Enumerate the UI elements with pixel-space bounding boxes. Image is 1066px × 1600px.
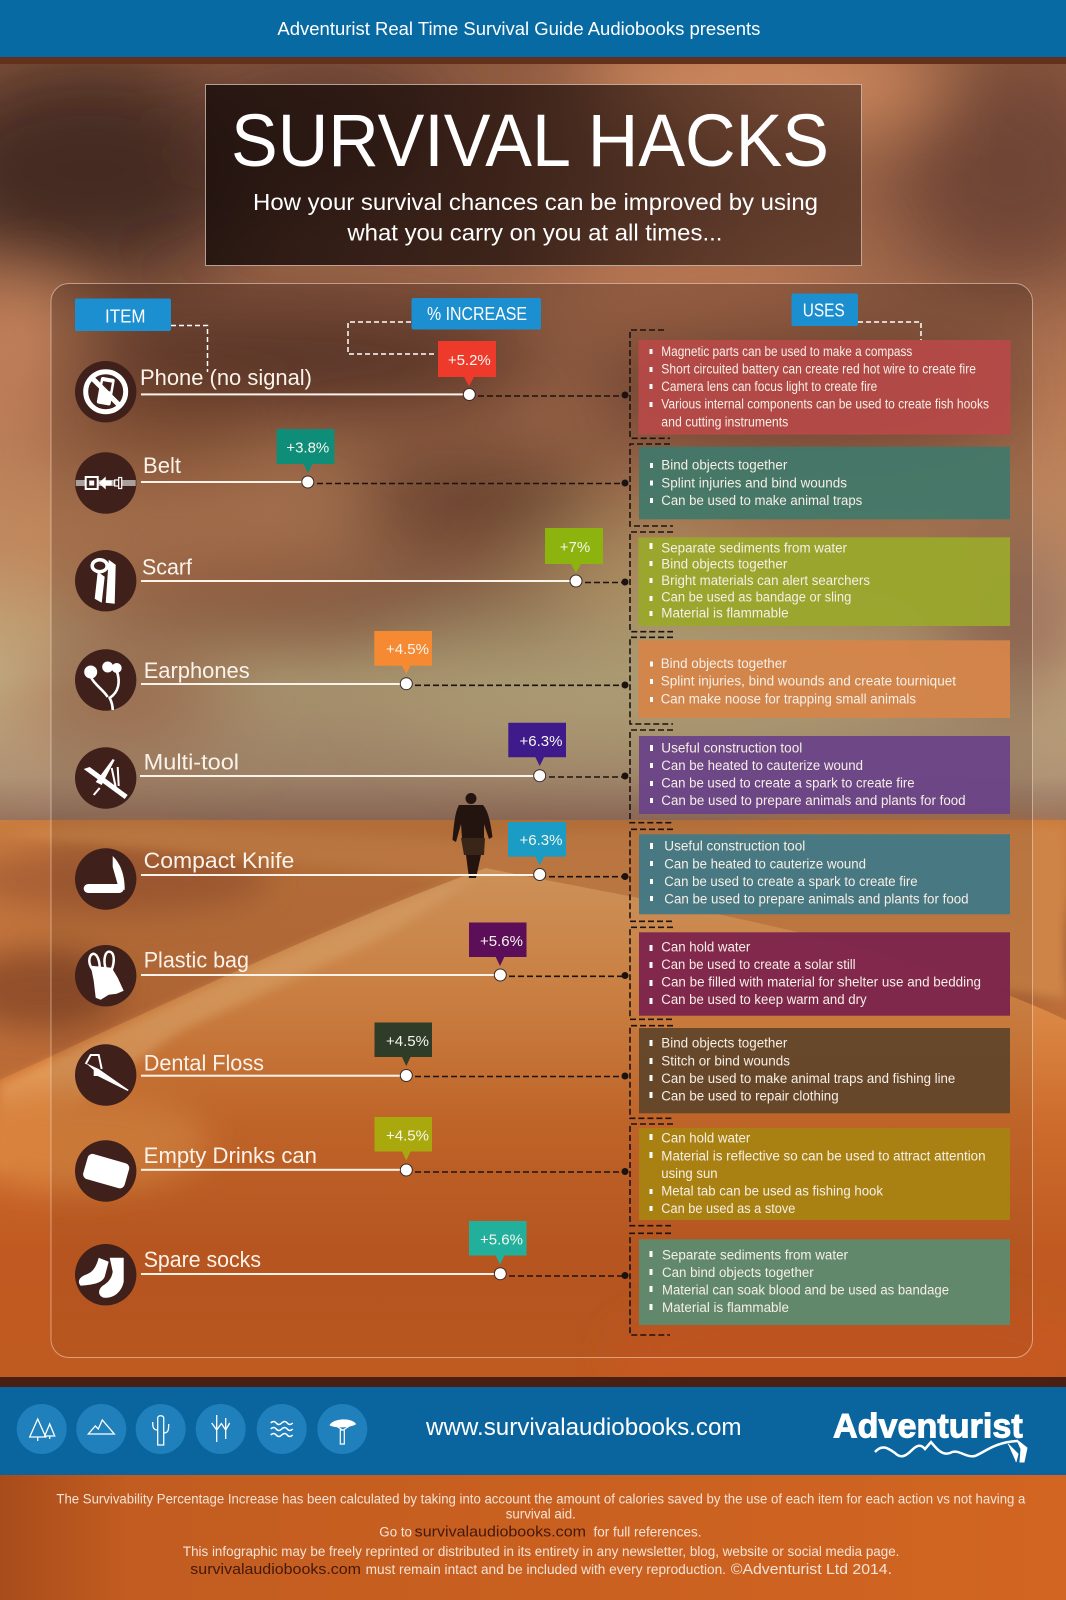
reference line — [379, 1524, 702, 1541]
callout: +5.2%: +5.2% — [448, 352, 491, 369]
icon: water — [257, 1404, 307, 1454]
reprint note: This infographic may be freely reprinted or distributed in its entirety in any newsletter, blog, website or social media page. — [183, 1544, 899, 1559]
label: Plastic bag — [144, 948, 249, 973]
subtitle: How your survival chances can be improved by using — [253, 189, 818, 215]
callout: +4.5% — [374, 1117, 432, 1176]
uses panel: multi-tool: Can be used to prepare animals and plants for food — [661, 793, 966, 808]
callout: +5.6% — [469, 1221, 526, 1280]
icon: crossed-out phone — [75, 361, 136, 422]
callout: +4.5%: +4.5% — [386, 1033, 429, 1050]
reference line: survivalaudiobooks.com — [415, 1524, 586, 1541]
item row: plastic bag — [75, 922, 628, 1006]
uses panel: earphones: Can make noose for trapping small animals — [661, 691, 916, 706]
icon: earphones — [75, 649, 136, 711]
label: Earphones — [144, 658, 250, 683]
callout: +5.6%: +5.6% — [480, 933, 523, 950]
uses panel: dental floss — [639, 1028, 1010, 1113]
uses panel: plastic bag: Can be filled with material for shelter use and bedding — [661, 975, 981, 990]
icon: trees — [17, 1404, 67, 1454]
callout: +6.3%: +6.3% — [520, 832, 562, 849]
uses panel: phone: Various internal components can be used to create fish hooks — [661, 397, 989, 412]
label: Scarf — [142, 554, 193, 579]
item row: compact knife — [75, 822, 628, 910]
uses panel: scarf: Bind objects together — [661, 557, 788, 572]
uses panel: phone: and cutting instruments — [661, 414, 789, 429]
item row: belt — [75, 429, 628, 514]
uses panel: spare socks: Material can soak blood and be used as bandage — [662, 1283, 949, 1298]
uses panel: multi-tool: Can be used to create a spark to create fire — [661, 776, 915, 791]
uses panel: belt: Splint injuries and bind wounds — [661, 475, 847, 490]
callout: +3.8% — [277, 429, 334, 488]
main panel — [51, 284, 1032, 1358]
uses panel: plastic bag — [639, 932, 1010, 1016]
uses panel: drinks can: using sun — [661, 1166, 718, 1181]
uses panel: scarf: Separate sediments from water — [661, 540, 847, 555]
uses panel: belt: Can be used to make animal traps — [661, 493, 863, 508]
icon: scarf — [75, 550, 136, 611]
label: Dental Floss — [144, 1051, 264, 1076]
icon: socks — [75, 1244, 136, 1305]
callout: +5.6% — [469, 922, 526, 981]
callout: +5.6%: +5.6% — [480, 1232, 523, 1248]
callout: +3.8%: +3.8% — [286, 440, 329, 456]
subtitle — [253, 189, 818, 246]
footnote area: survival aid. — [506, 1506, 576, 1521]
uses panel: spare socks — [639, 1239, 1010, 1325]
column header: item — [75, 298, 208, 372]
item row: drinks can — [75, 1117, 628, 1202]
callout: +4.5%: +4.5% — [386, 1128, 429, 1144]
uses panel: belt: Bind objects together — [661, 458, 788, 473]
uses panel: scarf: Material is flammable — [661, 606, 789, 621]
uses panel: knife: Can be used to create a spark to create fire — [664, 874, 918, 889]
copyright line: survivalaudiobooks.com — [190, 1561, 361, 1578]
uses panel: earphones — [638, 640, 1010, 718]
uses panel: drinks can: Can hold water — [661, 1131, 751, 1146]
uses panel: spare socks: Separate sediments from water — [662, 1247, 848, 1262]
callout: +7% — [545, 528, 603, 587]
callout: +4.5% — [374, 1022, 432, 1082]
presenter line: Adventurist Real Time Survival Guide Audiobooks presents — [277, 18, 760, 39]
callout: +6.3%: +6.3% — [520, 733, 562, 750]
icon: cactus — [136, 1404, 186, 1454]
column header: percent increase — [348, 298, 541, 354]
reference line: Go to — [379, 1525, 412, 1540]
icon: belt — [75, 452, 136, 514]
uses panel: knife: Useful construction tool — [664, 839, 805, 854]
uses panel: phone — [638, 340, 1011, 435]
icon: plastic bag — [75, 945, 136, 1006]
uses panel: dental floss: Stitch or bind wounds — [661, 1053, 790, 1068]
item row: scarf — [75, 528, 628, 611]
title block — [206, 84, 862, 266]
label: Spare socks — [144, 1247, 261, 1272]
callout: +6.3% — [508, 723, 566, 782]
uses panel: multi-tool — [639, 736, 1010, 814]
uses panel: drinks can: Can be used as a stove — [661, 1201, 795, 1216]
column header: uses: USES — [803, 301, 845, 321]
uses panel: scarf — [638, 537, 1010, 626]
copyright line: must remain intact and be included with every reproduction. — [366, 1562, 726, 1577]
callout: +4.5% — [374, 631, 432, 690]
item row: spare socks — [75, 1221, 628, 1305]
callout: +7%: +7% — [560, 539, 590, 556]
copyright line: ©Adventurist Ltd 2014. — [731, 1561, 892, 1578]
icon: acacia tree — [317, 1404, 367, 1454]
uses panel: drinks can: Metal tab can be used as fishing hook — [661, 1183, 883, 1198]
icon: can — [75, 1140, 136, 1202]
reference line: for full references. — [594, 1525, 702, 1540]
item row: dental floss — [75, 1022, 628, 1106]
methodology note: The Survivability Percentage Increase has been calculated by taking into account the amount of calories saved by the use of each item for each action vs not having a — [56, 1491, 1026, 1506]
column header: percent increase: % INCREASE — [427, 304, 527, 324]
uses panel: belt — [639, 447, 1010, 519]
subtitle: what you carry on you at all times... — [346, 220, 722, 246]
uses panel: spare socks: Can bind objects together — [662, 1265, 814, 1280]
uses panel: phone: Short circuited battery can create red hot wire to create fire — [661, 362, 976, 377]
uses panel: earphones: Bind objects together — [661, 656, 787, 671]
label: Multi-tool — [144, 749, 239, 774]
uses panel: dental floss: Can be used to make animal traps and fishing line — [661, 1071, 955, 1086]
label: Belt — [143, 453, 181, 478]
logo: Adventurist — [833, 1408, 1027, 1462]
dashed brackets linking rows to uses — [630, 330, 673, 1335]
item row: multi-tool — [75, 723, 628, 809]
uses panel: scarf: Bright materials can alert searchers — [661, 573, 870, 588]
uses panel: dental floss: Bind objects together — [661, 1036, 788, 1051]
uses panel: dental floss: Can be used to repair clothing — [661, 1088, 839, 1103]
item row: earphones — [75, 631, 628, 711]
footer band — [0, 1377, 1066, 1475]
icon: floss pick — [75, 1044, 136, 1106]
logo: Adventurist: Adventurist — [833, 1408, 1023, 1446]
uses panel: multi-tool: Can be heated to cauterize wound — [661, 758, 863, 773]
main title: SURVIVAL HACKS — [231, 99, 829, 182]
footnote area — [0, 1475, 1066, 1600]
uses panel: scarf: Can be used as bandage or sling — [661, 589, 851, 604]
item row: phone — [75, 341, 628, 422]
uses panel: plastic bag: Can be used to create a solar still — [661, 957, 856, 972]
icon: knife — [75, 848, 136, 910]
uses panel: phone: Magnetic parts can be used to make a compass — [661, 344, 913, 359]
icon: reeds — [196, 1404, 246, 1454]
label: Phone (no signal) — [140, 365, 312, 390]
icon: mountains — [76, 1404, 126, 1454]
callout: +5.2% — [438, 341, 496, 400]
uses panel: multi-tool: Useful construction tool — [661, 741, 802, 756]
hiker silhouette — [452, 793, 492, 878]
website address: www.survivalaudiobooks.com — [425, 1414, 742, 1441]
column header: uses — [792, 294, 921, 340]
uses panel: knife: Can be used to prepare animals and plants for food — [664, 891, 969, 906]
label: Compact Knife — [144, 848, 294, 873]
top header bar — [0, 0, 1066, 64]
uses panel: phone: Camera lens can focus light to create fire — [661, 379, 877, 394]
uses panel: knife — [639, 834, 1010, 914]
uses panel: drinks can: Material is reflective so can be used to attract attention — [661, 1148, 986, 1163]
uses panel: knife: Can be heated to cauterize wound — [664, 856, 866, 871]
label: Empty Drinks can — [144, 1143, 317, 1168]
column header: item: ITEM — [105, 306, 146, 326]
callout: +4.5%: +4.5% — [386, 641, 429, 658]
icon: multi-tool — [75, 747, 136, 809]
uses panel: drinks can — [639, 1128, 1010, 1220]
uses panel: earphones: Splint injuries, bind wounds and create tourniquet — [661, 674, 956, 689]
callout: +6.3% — [508, 822, 566, 880]
copyright line — [190, 1561, 892, 1578]
uses panel: plastic bag: Can hold water — [661, 939, 751, 954]
uses panel: spare socks: Material is flammable — [662, 1300, 789, 1315]
uses panel: plastic bag: Can be used to keep warm and dry — [661, 992, 867, 1007]
